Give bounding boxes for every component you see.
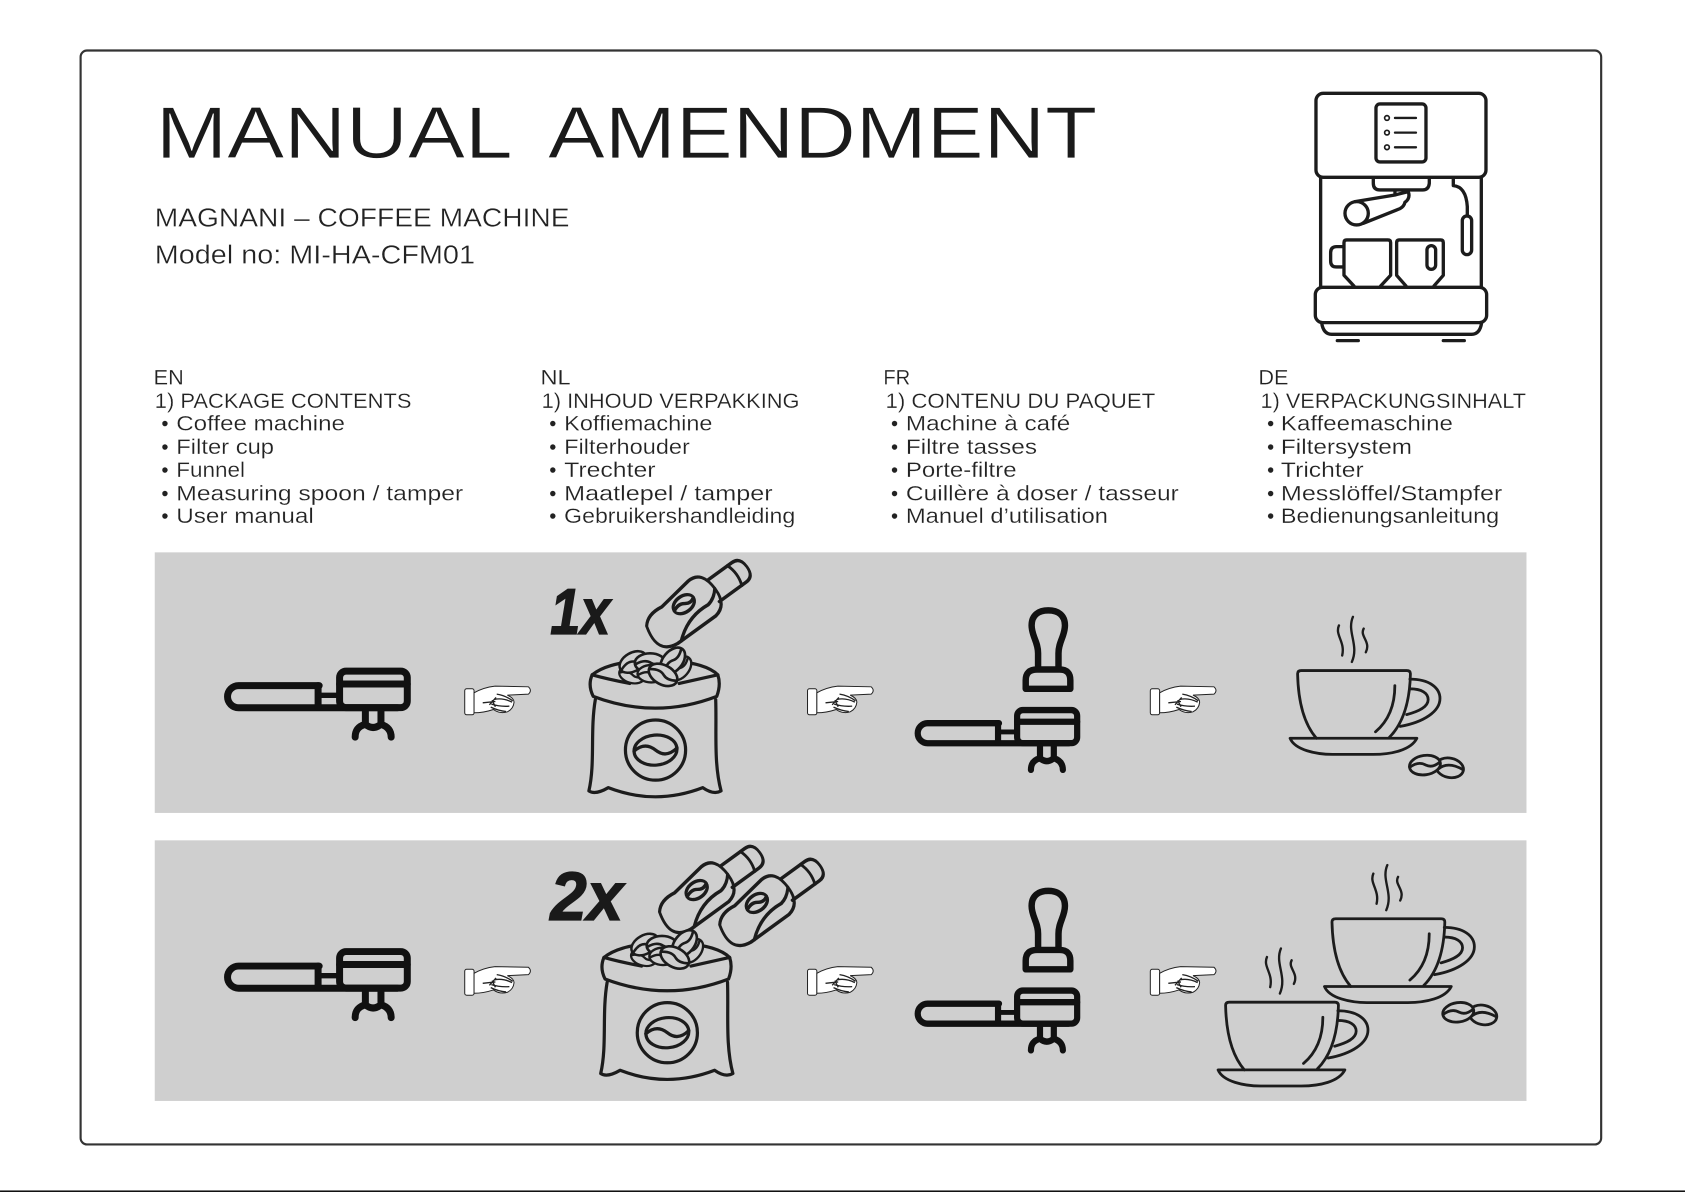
text block: EN package contents	[154, 366, 463, 528]
text block: DE package contents	[1258, 366, 1526, 528]
icon: empty portafilter	[228, 671, 407, 737]
subtitle: product and model: MAGNANI – COFFEE MACHINE	[155, 205, 570, 233]
icon: coffee scoop one	[651, 834, 772, 939]
text block: EN package contents: •	[161, 505, 169, 528]
text block: EN package contents: Coffee machine	[176, 413, 345, 436]
text block: DE package contents: DE	[1258, 366, 1288, 389]
text block: FR package contents: 1) CONTENU DU PAQUET	[885, 390, 1155, 413]
text block: EN package contents: User manual	[176, 505, 314, 528]
icon: empty portafilter	[228, 952, 407, 1018]
text block: DE package contents: Bedienungsanleitung	[1281, 505, 1499, 528]
text block: EN package contents: Funnel	[176, 459, 245, 482]
text block: DE package contents: •	[1267, 436, 1274, 459]
label: 2x: 2x	[548, 858, 626, 935]
text block: FR package contents: •	[891, 413, 898, 436]
icon: coffee bag	[601, 926, 733, 1079]
icon: coffee beans	[1408, 753, 1465, 780]
text block: FR package contents: •	[891, 505, 898, 528]
text block: FR package contents: Manuel d’utilisation	[906, 505, 1108, 528]
bottom page line	[0, 1190, 1685, 1192]
title: MANUAL	[156, 93, 513, 174]
icon: single cup	[1290, 617, 1440, 754]
text block: FR package contents: FR	[883, 366, 910, 389]
text block: DE package contents: 1) VERPACKUNGSINHALT	[1261, 390, 1526, 413]
text block: DE package contents: •	[1267, 482, 1274, 505]
text block: FR package contents: •	[891, 459, 898, 482]
text block: EN package contents: •	[161, 436, 169, 459]
text block: NL package contents: •	[549, 482, 556, 505]
text block: FR package contents	[883, 366, 1179, 528]
label: 1x: 1x	[550, 576, 613, 648]
text block: NL package contents: •	[549, 505, 556, 528]
text block: EN package contents: 1) PACKAGE CONTENTS	[155, 390, 412, 413]
text block: NL package contents: Gebruikershandleiding	[564, 505, 795, 528]
text block: EN package contents: Filter cup	[176, 436, 274, 459]
subtitle: product and model: Model no: MI-HA-CFM01	[155, 241, 475, 269]
text block: NL package contents: Maatlepel / tamper	[564, 482, 773, 505]
icon: portafilter under tamper	[918, 710, 1077, 770]
text block: EN package contents: •	[161, 482, 169, 505]
arrow: pointing hand 1	[465, 686, 530, 715]
icon: tamper	[1026, 891, 1070, 969]
text block: DE package contents: •	[1267, 505, 1274, 528]
icon: coffee scoop	[638, 548, 759, 654]
text block: NL package contents: 1) INHOUD VERPAKKING	[542, 390, 800, 413]
text block: DE package contents: Messlöffel/Stampfer	[1281, 482, 1502, 505]
text block: EN package contents: •	[161, 413, 169, 436]
panel: one-cup steps	[155, 548, 1526, 813]
text block: NL package contents: Trechter	[564, 459, 656, 482]
icon: coffee beans	[1441, 1001, 1499, 1027]
panel: two-cup steps	[155, 834, 1526, 1101]
text block: NL package contents: NL	[541, 366, 571, 389]
arrow: pointing hand 3	[1150, 967, 1216, 995]
subtitle: product and model	[155, 205, 570, 269]
title: AMENDMENT	[548, 93, 1097, 174]
text block: EN package contents: Measuring spoon / tamper	[176, 482, 463, 505]
text block: EN package contents: EN	[154, 366, 184, 389]
text block: NL package contents: •	[549, 413, 556, 436]
text block: NL package contents: Filterhouder	[564, 436, 690, 459]
icon: coffee scoop two	[711, 847, 833, 952]
text block: FR package contents: Filtre tasses	[906, 436, 1037, 459]
arrow: pointing hand 2	[808, 686, 873, 715]
text block: FR package contents: Machine à café	[906, 413, 1070, 436]
icon: portafilter under tamper	[918, 991, 1077, 1050]
icon: tamper	[1026, 610, 1070, 689]
arrow: pointing hand 2	[808, 967, 873, 995]
text block: FR package contents: •	[891, 482, 898, 505]
text block: NL package contents: •	[549, 459, 556, 482]
text block: NL package contents	[541, 366, 800, 528]
arrow: pointing hand 1	[465, 967, 530, 995]
icon: rear cup	[1324, 865, 1474, 1003]
text block: FR package contents: •	[891, 436, 898, 459]
text block: DE package contents: Filtersystem	[1281, 436, 1412, 459]
text block: DE package contents: •	[1267, 413, 1274, 436]
text block: DE package contents: Trichter	[1281, 459, 1364, 482]
text block: DE package contents: •	[1267, 459, 1274, 482]
text block: NL package contents: Koffiemachine	[564, 413, 712, 436]
icon: coffee bag	[589, 643, 721, 797]
text block: FR package contents: Cuillère à doser / tasseur	[906, 482, 1179, 505]
icon: front cup	[1218, 948, 1368, 1086]
icon: coffee machine	[1315, 93, 1487, 341]
title	[156, 93, 1097, 174]
text block: EN package contents: •	[161, 459, 169, 482]
text block: DE package contents: Kaffeemaschine	[1281, 413, 1453, 436]
text block: NL package contents: •	[549, 436, 556, 459]
arrow: pointing hand 3	[1150, 686, 1216, 715]
text block: FR package contents: Porte-filtre	[906, 459, 1017, 482]
